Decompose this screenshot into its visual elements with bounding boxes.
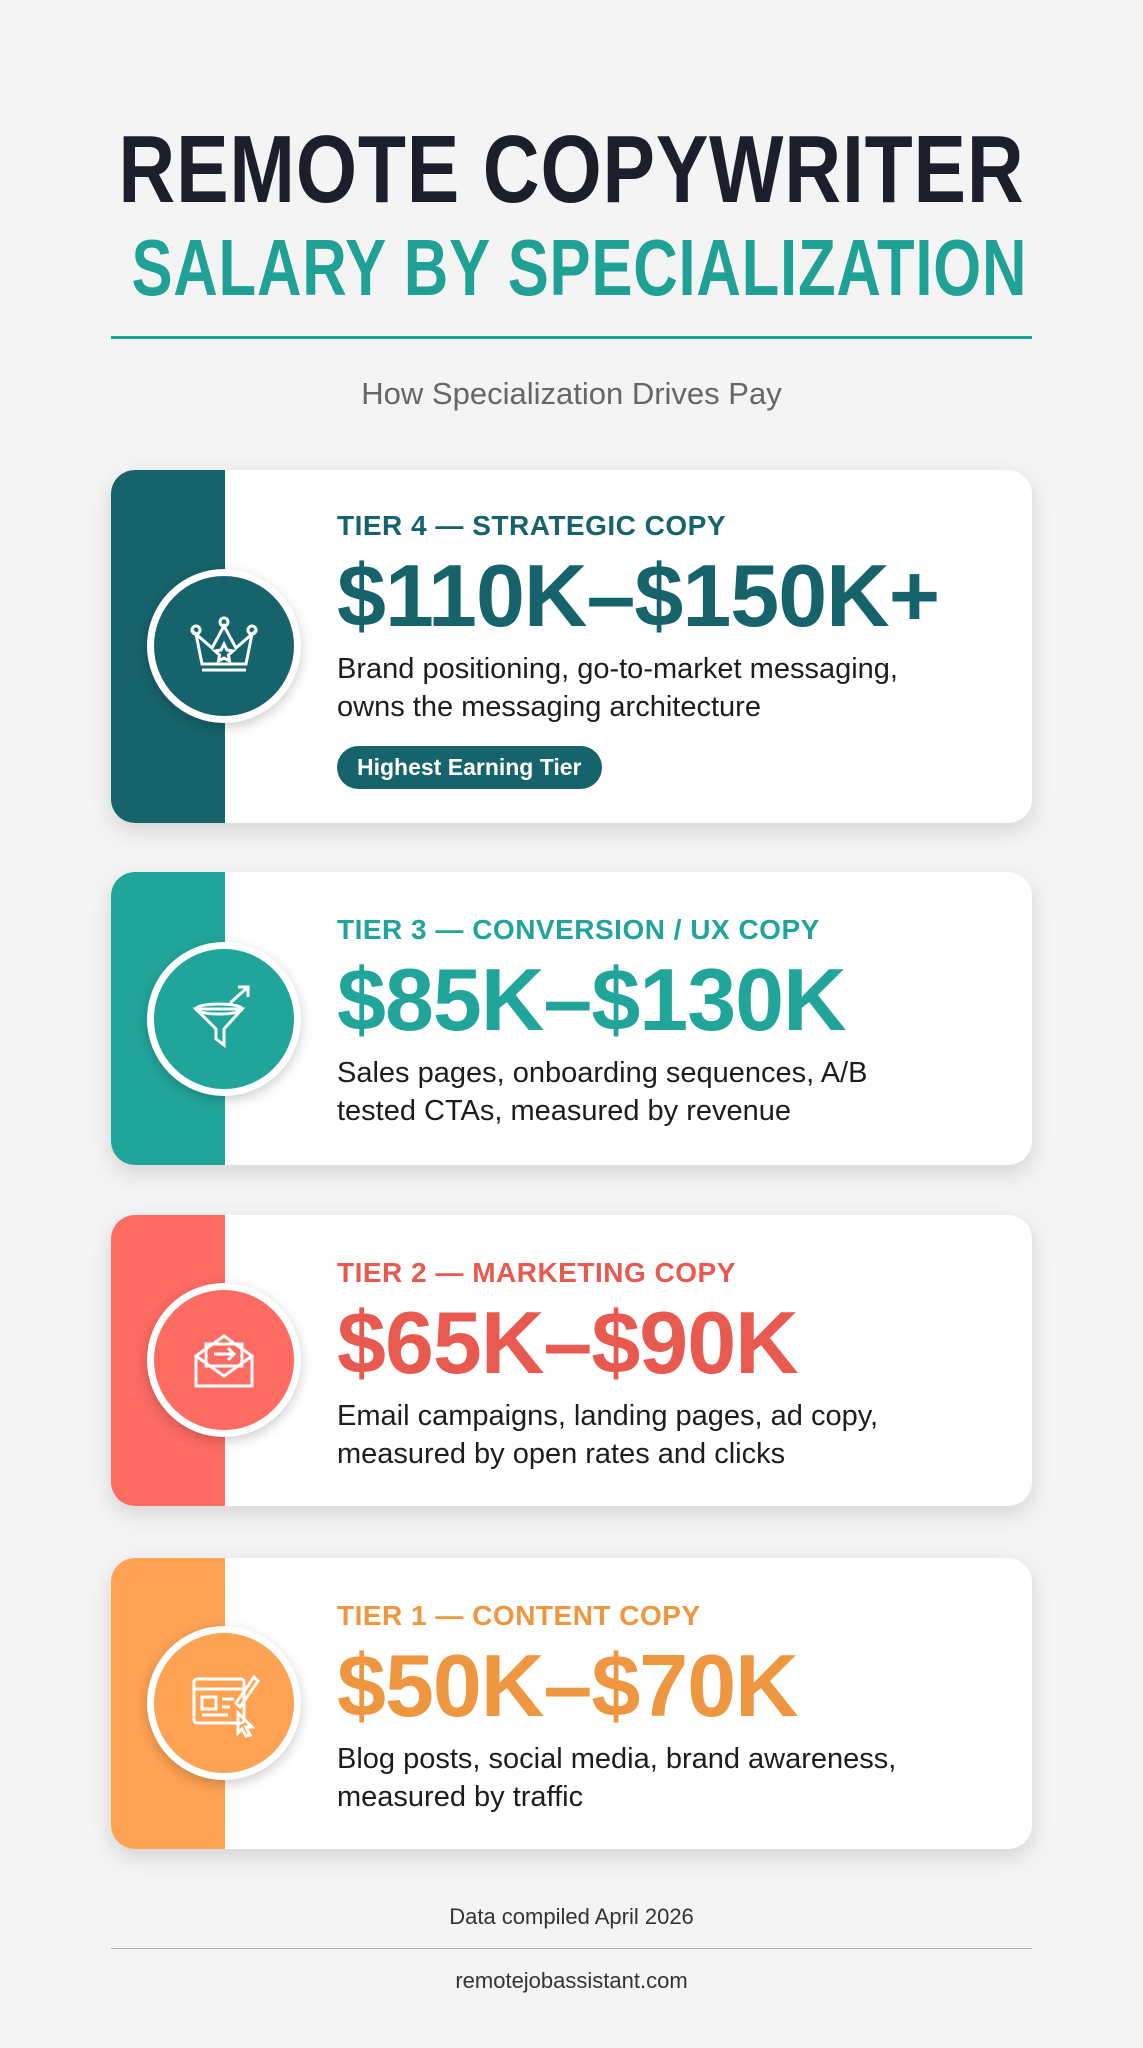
- card: tier 2: measured by open rates and clicks: [337, 1438, 785, 1470]
- card: tier 1: Blog posts, social media, brand awareness,: [337, 1743, 896, 1775]
- card: tier 3: [111, 872, 1032, 1165]
- icon: funnel: [147, 942, 301, 1096]
- footer: url: remotejobassistant.com: [455, 1968, 688, 1993]
- card: tier 1: [111, 1558, 1032, 1849]
- card: tier 3: tested CTAs, measured by revenue: [337, 1095, 791, 1127]
- card: tier 3: TIER 3 — CONVERSION / UX COPY: [337, 914, 820, 945]
- title line 2: SALARY BY SPECIALIZATION: [131, 223, 1027, 312]
- card: tier 3: Sales pages, onboarding sequences, A/B: [337, 1057, 867, 1089]
- card: tier 4: Brand positioning, go-to-market messaging,: [337, 653, 898, 685]
- icon: envelope: [147, 1283, 301, 1437]
- card: tier 1: $50K–$70K: [337, 1636, 798, 1735]
- card: tier 2: $65K–$90K: [337, 1293, 798, 1392]
- card: tier 4: TIER 4 — STRATEGIC COPY: [337, 510, 726, 541]
- card: tier 2: [111, 1215, 1032, 1506]
- title line 1: REMOTE COPYWRITER: [118, 116, 1025, 223]
- icon: crown: [147, 569, 301, 723]
- card: tier 4: [111, 470, 1032, 823]
- card: tier 4: $110K–$150K+: [337, 546, 939, 645]
- icon: content editor: [147, 1626, 301, 1780]
- card: tier 2: TIER 2 — MARKETING COPY: [337, 1257, 736, 1288]
- card: tier 1: measured by traffic: [337, 1781, 583, 1813]
- card: tier 1: TIER 1 — CONTENT COPY: [337, 1600, 701, 1631]
- subtitle: How Specialization Drives Pay: [361, 376, 782, 411]
- card: tier 4: Highest Earning Tier: [357, 754, 582, 780]
- card: tier 4: owns the messaging architecture: [337, 691, 761, 723]
- card: tier 3: $85K–$130K: [337, 950, 846, 1049]
- footer: date: Data compiled April 2026: [449, 1904, 694, 1929]
- card: tier 2: Email campaigns, landing pages, ad copy,: [337, 1400, 878, 1432]
